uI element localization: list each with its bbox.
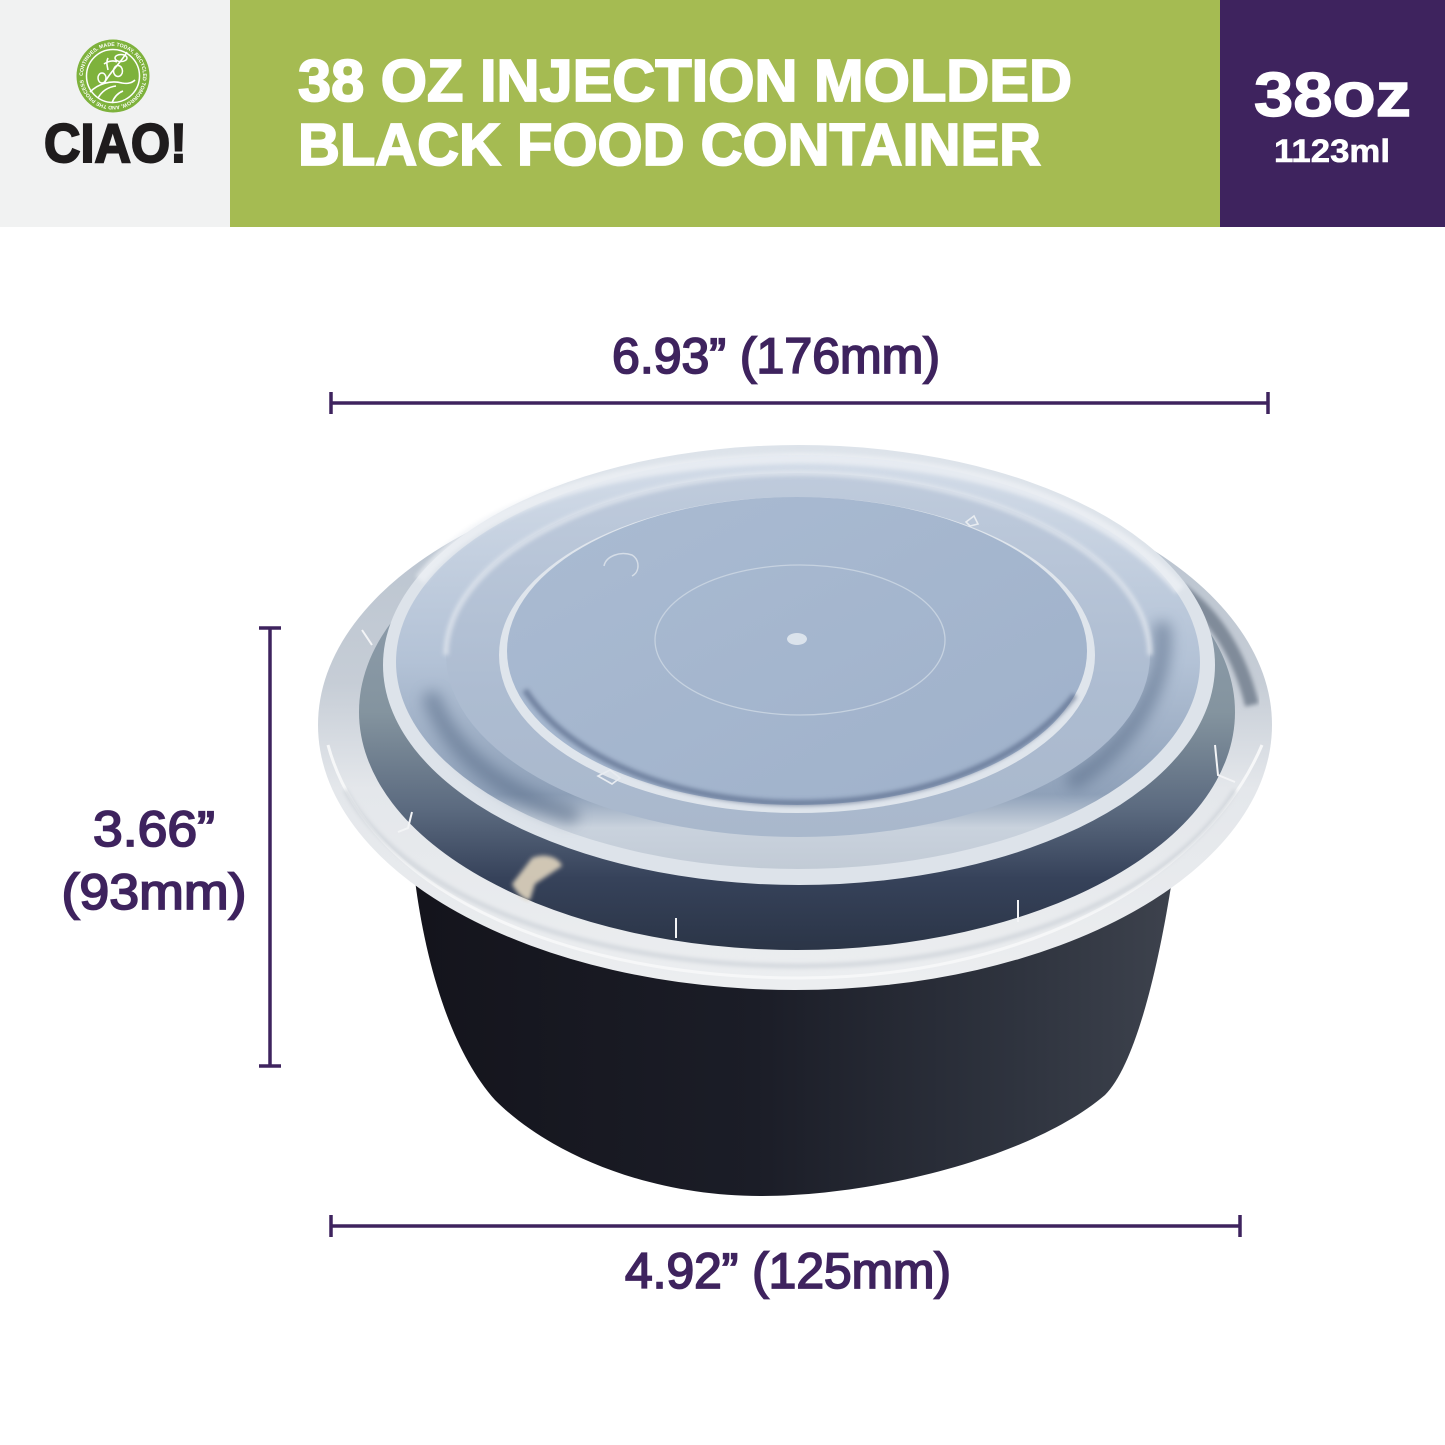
lid dome	[383, 445, 1215, 885]
black bowl	[415, 880, 1172, 1196]
glare on rim	[512, 856, 562, 900]
logo wordmark: CIAO!	[44, 112, 187, 174]
title: BLACK FOOD CONTAINER	[298, 112, 1041, 178]
injection point	[787, 633, 807, 645]
header: capacity panel	[1220, 0, 1445, 227]
arrow: base width bracket	[331, 1215, 1240, 1237]
clear rim	[318, 460, 1272, 990]
title: 38 OZ INJECTION MOLDED	[298, 48, 1072, 114]
header: logo panel	[0, 0, 230, 227]
small embossed circle	[604, 554, 638, 576]
icon: green recycling badge: CONTINUES. MADE TODAY, RECYCLED TOMORROW, AND THE PROCESS	[79, 42, 147, 110]
base dimension	[331, 1215, 1240, 1299]
disc ring	[499, 497, 1095, 813]
rim tabs	[362, 630, 1235, 938]
width dimension: 6.93” (176mm)	[612, 328, 940, 384]
base dimension: 4.92” (125mm)	[625, 1243, 951, 1299]
container photo illustration	[318, 445, 1272, 1196]
width dimension	[331, 328, 1268, 414]
skirt blue shading	[432, 630, 1163, 815]
capacity in ounces: 38oz	[1254, 61, 1411, 130]
arrow: top width bracket	[331, 392, 1268, 414]
title	[298, 48, 1072, 178]
height dimension: 3.66”	[93, 801, 215, 857]
embossed marks	[598, 516, 978, 784]
height dimension	[62, 628, 281, 1066]
arrow: height bracket	[259, 628, 281, 1066]
disc shadow	[525, 690, 1075, 803]
centre circle	[655, 565, 945, 715]
header: title panel	[230, 0, 1220, 227]
capacity in millilitres: 1123ml	[1274, 133, 1390, 169]
upper-right rim shadow	[1180, 590, 1252, 705]
height dimension: (93mm)	[62, 864, 246, 920]
